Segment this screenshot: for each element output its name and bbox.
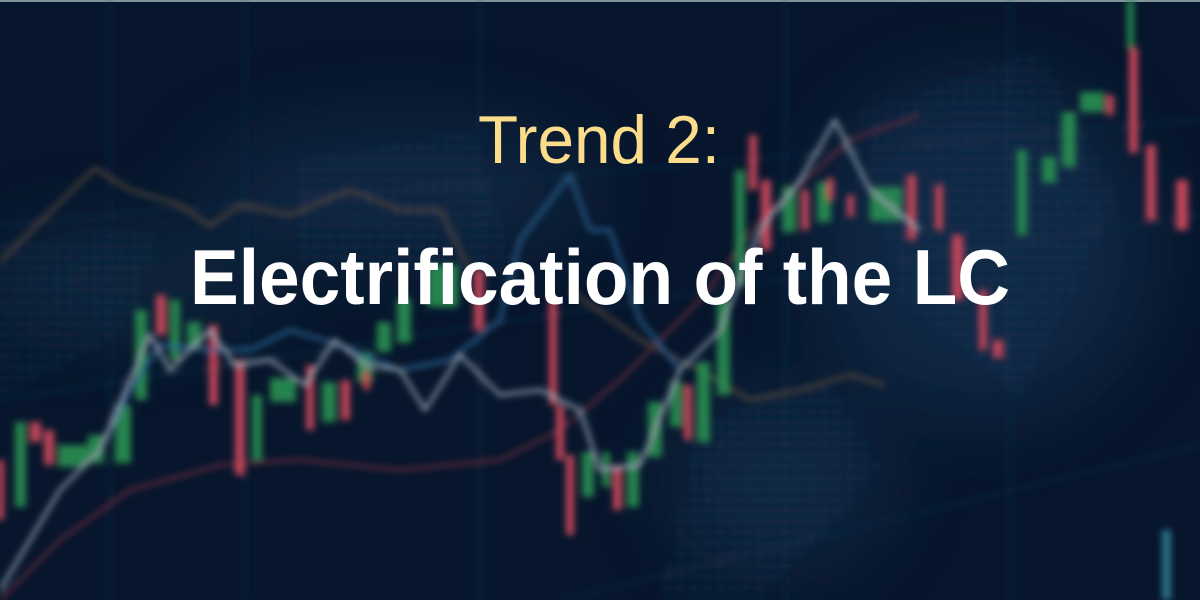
heading: Electrification of the LC: Electrification of the LC	[190, 233, 1010, 321]
soft background tint	[0, 80, 1150, 570]
title: Trend 2: Trend 2:	[478, 102, 720, 178]
candles	[15, 0, 1134, 507]
